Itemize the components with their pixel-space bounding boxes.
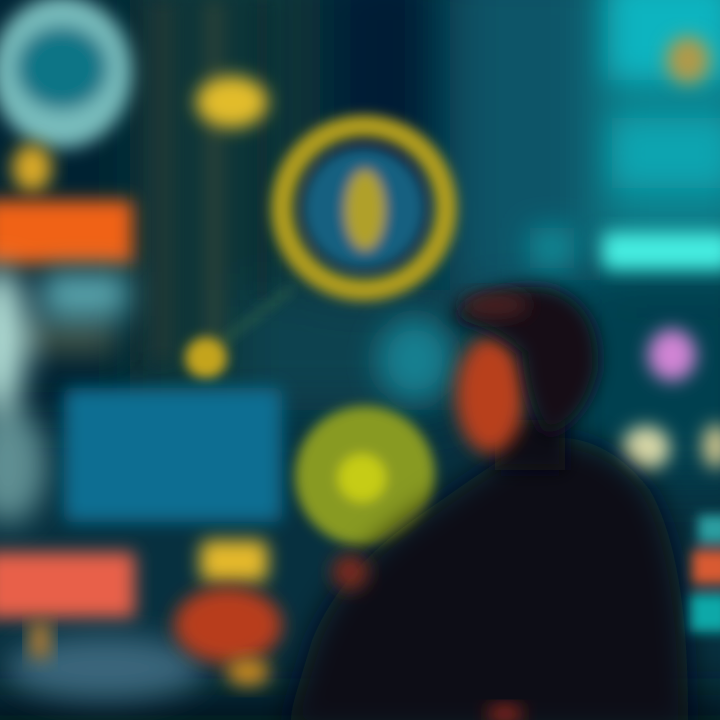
neck shadow [495, 420, 565, 470]
orange bar [0, 200, 133, 264]
teal blob [377, 318, 453, 402]
right stripes [690, 515, 720, 632]
icon: large gold ring [282, 126, 446, 290]
bottom red glint [487, 706, 523, 720]
jacket glow [332, 554, 368, 590]
icon: triangle on screen [666, 36, 710, 84]
panel: blue chart [64, 388, 282, 522]
icon: yellow pill [196, 76, 268, 128]
face [456, 337, 524, 453]
amber tick [30, 622, 50, 658]
red block [174, 587, 282, 663]
hair tint [461, 293, 529, 317]
icons: pale dots [622, 424, 720, 470]
icon: yellow flame [12, 144, 52, 192]
person [285, 287, 688, 720]
body [285, 437, 688, 720]
salmon block [0, 552, 135, 618]
panel: bottom left orange [0, 540, 282, 700]
icon: small gold dot [185, 337, 227, 379]
icon: cloud ring [0, 0, 132, 148]
connector line [222, 288, 292, 342]
hair [450, 287, 598, 435]
icon: green circle [295, 406, 435, 546]
slate block [5, 636, 205, 700]
yellow block [200, 540, 268, 582]
icon: pink dot [648, 329, 696, 381]
glowing bar [602, 232, 720, 270]
panel: left stack [0, 144, 133, 523]
pale teal blocks [0, 266, 128, 523]
amber base [226, 658, 270, 686]
panel: right teal screen [530, 0, 720, 268]
